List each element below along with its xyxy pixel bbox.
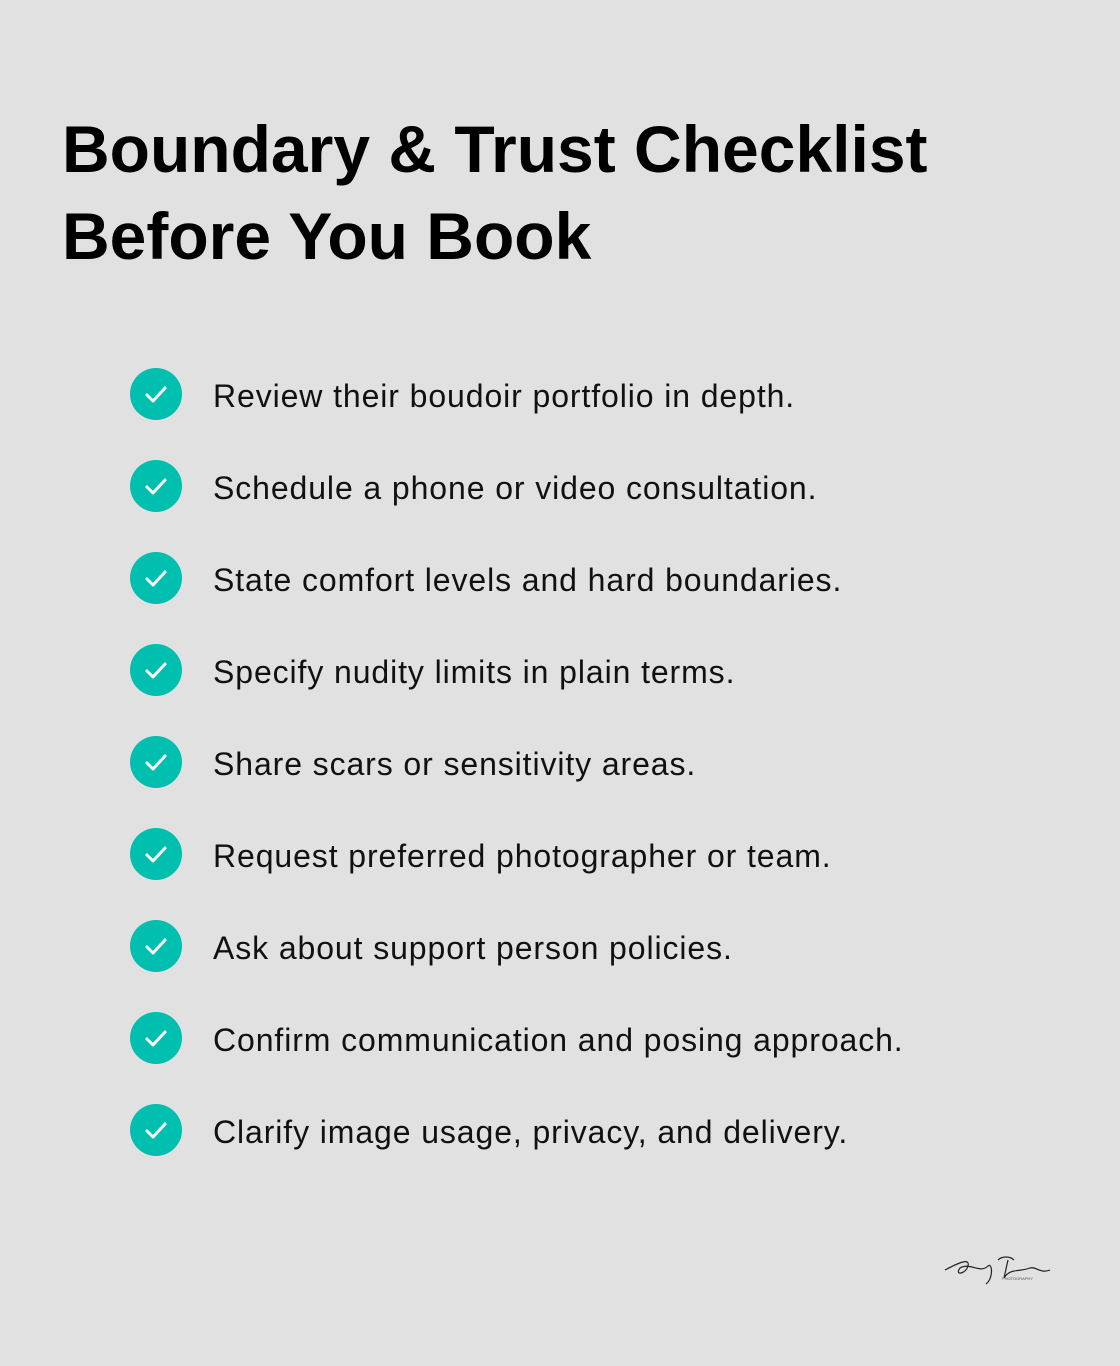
item 4: Specify nudity limits in plain terms. <box>213 654 735 690</box>
title <box>62 112 928 273</box>
title: Before You Book <box>62 199 591 273</box>
item 8: Confirm communication and posing approach. <box>213 1022 904 1058</box>
item 6 <box>130 828 832 880</box>
item 2: Schedule a phone or video consultation. <box>213 470 817 506</box>
item 3: State comfort levels and hard boundaries. <box>213 562 842 598</box>
item 5: Share scars or sensitivity areas. <box>213 746 696 782</box>
signature logo: PHOTOGRAPHY <box>1002 1276 1033 1281</box>
item 3 <box>130 552 842 604</box>
item 4 <box>130 644 735 696</box>
item 8 <box>130 1012 904 1064</box>
item 9: Clarify image usage, privacy, and delivery. <box>213 1114 848 1150</box>
item 9 <box>130 1104 848 1156</box>
signature logo <box>944 1256 1050 1284</box>
item 2 <box>130 460 817 512</box>
item 1 <box>130 368 795 420</box>
item 7 <box>130 920 733 972</box>
item 7: Ask about support person policies. <box>213 930 733 966</box>
item 1: Review their boudoir portfolio in depth. <box>213 378 795 414</box>
title: Boundary & Trust Checklist <box>62 112 928 186</box>
item 6: Request preferred photographer or team. <box>213 838 832 874</box>
item 5 <box>130 736 696 788</box>
checklist <box>130 368 904 1156</box>
